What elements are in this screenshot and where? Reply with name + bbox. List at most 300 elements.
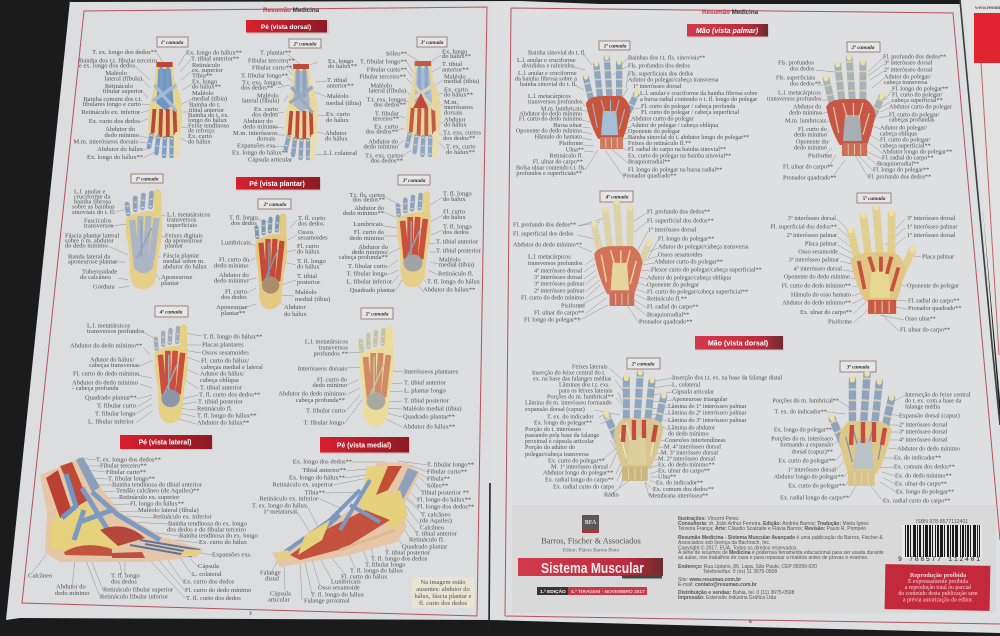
labels left: Tíbia** [305,490,325,496]
labels right: 1º interósseo dorsal [907,232,956,239]
labels right: da aponeurose [165,238,202,244]
panel: mão palmar 5ª camada [770,193,961,334]
labels left: dedo mínimo [105,132,139,139]
credits: as aulas, nos trabalhos de casa e para repassar a matéria antes de provas e exames. [678,555,868,561]
labels left: Ex. radial longo do carpo** [545,476,614,484]
labels right: Bainha do t. [189,102,221,108]
labels right: Fl. profundo dos dedos** [883,54,946,60]
layer label: 5ª camada [863,196,886,202]
labels right: T. tibial posterior [404,398,450,404]
labels left: 2º interósseo palmar [534,288,584,294]
labels right: Fl. radial do carpo na bainha sinovial** [628,146,726,153]
labels left: Bainha dos t.t. fibular terceiro [79,58,157,64]
labels right: Bainha do t. ex. [188,112,229,119]
labels left: L.l. metatársicos [305,338,348,346]
labels left: T. fibular longo [304,420,344,426]
labels right: Abdutor do hálux** [197,420,249,426]
labels bottom and right: Lumbricais [331,578,361,586]
labels: T. fl. longo [111,572,140,580]
layer label: 1ª camada [604,44,627,50]
heading: Pé (vista dorsal): Pé (vista dorsal) [261,24,311,31]
labels right [623,54,758,180]
labels left: divididos e rafeiridos [522,62,575,70]
labels right: Ossos [298,229,314,236]
labels left: M.m. interósseos dorsais [73,138,138,146]
labels right: Ulna** [658,474,676,480]
labels right: Fl. profundo dos dedos** [647,208,710,216]
labels left: Pronador quadrado** [783,174,836,182]
labels left: Retináculo ex. inferior [81,109,141,116]
labels left: cabeça profunda** [296,397,345,404]
labels left: Fl. superficial dos dedos** [770,224,837,230]
labels left: 3º interósseo palmar [534,280,584,288]
labels right: Oponente do polegar [628,128,680,135]
labels left: dorsais [257,136,276,142]
labels left: sobre o m. abdutor [65,238,115,244]
heading: Mão (vista dorsal) [695,336,784,351]
labels bottom and right: T. fl. longo dos dedos [371,556,428,562]
labels right [649,374,782,500]
leader lines [238,219,297,310]
labels: Fl. longo do hálux** [130,500,184,508]
labels left: transversos [84,222,114,230]
note box: hálux, fáscia plantar e [414,593,472,600]
labels left [770,215,852,326]
labels right: Fl. curto do polegar / cabeça profunda [641,103,736,110]
labels right [186,50,242,146]
panel: mão palmar 2ª camada [767,42,952,182]
labels left: Retináculo ex. inferior [259,496,319,502]
labels left: transversos profundos [767,96,822,102]
labels left: Pisiforme [808,152,832,160]
labels left: do dedo mínimo [65,242,108,250]
labels right: Fl. superficial dos dedos** [647,218,714,224]
labels bottom and right: T. fl. longo do hálux [350,568,404,574]
labels left: aponeurose plantar [68,258,118,266]
labels: Retináculo ex. superior [119,494,180,501]
labels bottom and right: Osso sesamoide [318,584,360,592]
labels left: 2º interósseo palmar [787,232,837,239]
labels right: Pronador quadrado** [623,172,676,180]
labels left: T. ex. longo dos dedos** [92,49,157,56]
labels right: Membrana interóssea** [649,492,708,500]
labels right: T. tibial anterior [436,238,479,246]
labels right: Maléolo [327,93,349,100]
labels left: Abdutor do [105,126,135,133]
labels right: M. 4º interósseo dorsal [664,444,721,450]
labels left: Bainha sinovial do t. fl. [528,50,587,56]
labels left: Lumbricais [353,221,383,228]
labels right: Lâmina do 2º interósseo palmar [668,410,747,416]
labels right: superficiais [167,222,197,229]
page: right [490,0,1000,633]
labels right: Bainhas dos t.t. fls. sinoviais** [628,54,705,62]
labels right: tibial anterior [189,107,225,114]
labels left: Ex. longo do hálux** [232,150,288,156]
labels: Retináculo ex. inferior [153,514,212,520]
labels bottom and right: Sóleo** [427,482,448,490]
labels left: Tuberosidade [82,268,117,276]
labels right: Fls. superficiais dos dedos [628,70,694,78]
labels: T. fibular longo** [108,476,155,482]
panel: pé dorsal 1ª camada [73,37,242,161]
labels left: dedo mínimo [794,144,827,152]
labels left: ex. na base das falanges médias [533,376,612,382]
labels left: dos dedos** [366,128,398,136]
note box: fl. curto dos dedos [419,600,467,607]
labels left: transversos profundos [528,98,583,106]
labels right: cabeça oblíqua [200,377,239,384]
leader lines [272,54,327,155]
credits: Impressão: Extensão Indústria Gráfica Ltda [678,595,776,601]
labels right: do hálux [188,138,211,146]
labels left: dedo mínimo [214,278,248,284]
labels right: Inserção dos t.t. ex. na base da falange distal [672,374,782,382]
labels left: M.m. interósseos [233,130,278,137]
labels right: Fl. curto do polegar/ [892,92,943,98]
labels bottom and right: T. calcâneo [421,512,450,518]
illustration: medial foot [272,462,420,567]
labels right: anterior** [442,66,469,74]
labels right: Fl. radial do carpo** [647,304,699,310]
labels left: Porção do t. interósseo [525,426,581,433]
labels right: T. fl. curto [298,215,325,222]
leader lines [134,332,202,424]
labels left: Fl. curto do dedo mínimo [73,370,139,378]
labels left: do calcâneo [80,274,111,281]
labels left [278,338,348,426]
labels left anchored: Retináculo fl. [549,152,583,160]
labels left: Fl. profundo dos dedos** [513,222,576,228]
labels right: T. tibial [442,61,462,68]
labels left: Abdutor do [219,272,249,279]
layer label [627,358,660,369]
labels right: Fl. longo do polegar** [873,166,929,174]
labels right [403,368,461,430]
labels: dos dedos [111,578,137,586]
labels right [161,212,211,287]
labels right: do hálux [443,196,466,203]
callout: reprodução proibida: Reprodução proibida [910,572,966,579]
leader lines [108,208,165,288]
labels bottom and right: Fibular curto** [427,468,467,476]
third sheet site text: www.resum [975,6,1000,11]
panel: pé plantar 5ª camada [278,308,461,430]
labels left: dedo mínimo/ [352,249,388,256]
leader lines [816,58,892,178]
labels right: Adutor do polegar/cabeça oblíqua [647,274,731,282]
labels right: do hálux [297,248,320,256]
labels left [73,49,157,161]
labels right: Aponeurose triangular [672,396,728,403]
illustration: hand [606,372,664,481]
labels right: Quadrado plantar** [403,414,455,420]
labels left: T. ex. longo do hálux [252,502,308,510]
labels: Expansões exs. [212,552,252,558]
panel: mão palmar 4ª camada [513,191,762,326]
credits: Ilustrações: Vincent Perez. [678,516,740,522]
layer label [398,175,430,185]
labels right: Abdutor [325,130,348,137]
labels left: Abdutor do [354,205,384,212]
labels right: Abdutor [444,116,466,124]
labels left: Ex. longo do polegar** [534,420,592,426]
labels left: dedo mínimo [364,144,398,150]
labels left: T. fibular longo [95,410,136,418]
edition bar [537,587,647,595]
labels right: Ex. comum dos dedos** [894,464,955,470]
labels right: do hálux** [444,92,473,98]
page number 6: 6 [749,619,752,625]
credits: Copyright © 2017, EUA. Todos os direitos reservados. [678,544,798,552]
labels right: Fáscia plantar [163,252,200,260]
labels left: cabeças transversas [89,362,140,369]
labels left: Ex. longo do hálux** [87,154,143,161]
labels right: Oponente do polegar [647,282,699,288]
labels right: Ex. ulnar do carpo** [658,468,710,474]
labels left: Fl. ulnar do carpo** [534,310,584,316]
labels: Bainha tendínosa do ex. longo [168,520,247,528]
labels: Bainha tendínosa do ex. longo [179,532,258,540]
labels left: Abdutor longo do polegar** [774,474,844,480]
labels left: dos dedos** [371,158,403,164]
labels left: Feixes laterais [572,364,608,370]
labels right: plantar [165,242,184,250]
credits: Site: www.resumao.com.br [678,577,741,583]
labels: Bainha tendínosa do tibial anterior [112,482,203,488]
labels left: Fáscia plantar lateral [65,232,119,240]
labels right: L.l. metatársicos [167,212,211,218]
labels left: Gordura [93,284,115,290]
labels right: Ex. longo [328,58,353,65]
illustration: foot plantar [256,217,287,309]
labels left: Fl. longo do polegar** [524,316,580,324]
labels right: dos dedos [298,220,324,228]
leader lines [344,352,403,427]
labels right: cabeça transversa [884,79,928,86]
labels left: Ex. radial longo do carpo** [780,494,849,502]
labels right: interósseos [444,104,473,111]
layer label: 4ª camada [159,310,183,316]
labels left: Interósseos dorsais [298,366,347,372]
labels left: Fl. curto do [354,229,384,236]
labels left: Retináculo [105,83,133,90]
labels right: Cápsula articular [672,388,714,396]
heading: Pé (vista dorsal) [246,20,329,34]
labels left: Tibial anterior** [302,467,346,474]
labels right: T. tibial posterior [436,248,482,254]
layer label [155,306,188,317]
labels right: Interósseos plantares [404,368,459,376]
labels left: Ex. curto [374,124,398,130]
labels right: Maléolo medial (tíbia) [403,406,461,412]
labels right: Fls. profundos dos dedos [628,62,690,70]
panel: mão dorsal 2ª camada [525,358,782,500]
labels right: cabeça superficial** [880,142,931,150]
labels right: 1º interósseo dorsal [648,226,697,234]
labels left: fibular superior [103,88,144,95]
labels bottom and right: Fl. longo dos dedos** [417,504,474,510]
labels bottom and right: T. fl. longo do hálux [311,592,365,598]
leader lines [827,395,905,501]
labels left: transversos profundos [528,260,583,267]
labels left: Ex. curto do polegar** [788,482,845,490]
labels right: Fl. curto do polegar / cabeça superficial [641,109,739,116]
labels left: passando pela base da falange [525,432,599,439]
labels right: Fl. ulnar do carpo** [900,326,950,334]
labels right: do dedo mínimo [668,430,709,438]
labels left: T. fibular curto [306,408,345,414]
labels left: fibulares longo e curto [82,101,141,108]
labels right: L.l. anular e cruciforme da bainha fibrosa sobre [640,90,758,97]
labels bottom and right: Retináculo fl. [409,536,445,544]
labels right: Adutor do polegar/cabeça transversa [658,244,749,250]
labels right: Adutor do polegar/ [880,124,927,132]
labels left [771,398,849,502]
panel: pé plantar 4ª camada [70,306,263,426]
title bar: Sistema Muscular: Sistema Muscular [541,560,644,577]
labels left: 4º interósseo dorsal [794,266,842,272]
labels right: Ex. curto [188,133,212,140]
labels right: T. fl. longo do hálux [427,278,481,286]
labels right: T. tibial posterior [198,398,244,406]
labels right: Adutor do polegar/ [884,74,931,80]
leader lines [574,54,641,176]
labels right: Lâmina do abdutor [668,424,715,432]
callout: reprodução proibida: do conteúdo desta publicação sem [898,591,978,597]
publisher: Barros, Fischer & Associados [541,536,641,546]
labels bottom and right [260,462,474,604]
labels left: Ex. radial curto do carpo [553,484,614,490]
labels right: Fl. curto [443,208,465,216]
labels left: Porções do m. interósseo [771,436,833,442]
labels right: Braquiorradial** [628,158,670,166]
labels left: Fascículos [84,218,112,224]
labels left: Abdutor do dedo mínimo** [70,342,142,350]
layer label: 1ª camada [161,40,184,46]
labels right: Abdutor longo do polegar** [882,148,952,156]
credits: Resumão Medicina - Sistema Muscular Avançado é uma publicação da Barros, Fischer & [678,535,883,541]
labels right: Pronador quadrado** [908,305,961,312]
labels left: L. fibular inferior [346,278,393,286]
labels left: Maléolo [370,82,392,90]
labels left: dedo mínimo** [343,210,384,217]
labels right: M. 3º interósseo dorsal [661,450,718,456]
labels left: Retináculo ex. superior [273,482,334,488]
heading: Mão (vista dorsal): Mão (vista dorsal) [708,340,769,348]
labels right: 4º interósseo dorsal [899,436,948,444]
labels right: Fl. curto do polegar/ [880,136,931,144]
title bar: Sistema Muscular [518,558,663,578]
labels left [232,50,295,164]
layer label [840,361,876,372]
labels right: Maléolo [295,289,317,296]
labels left: Porção do adutor do [525,444,575,451]
labels left: Quadrado plantar** [85,394,137,402]
labels left: Fibular terceiro** [248,58,295,64]
labels right: Retináculo fl. [197,406,233,412]
labels: Tendão calcâneo (de Aquiles)** [116,488,199,494]
layer label [857,193,891,203]
labels right: Ex. longo [192,78,217,86]
labels right: Expansão dorsal (capuz) [899,412,960,420]
layer label: 5ª camada [366,312,389,318]
labels left: Abdutor do [368,138,398,146]
credits: A série de resumos de Medicina é poderosa ferramenta educacional para ser usada durante [678,550,884,556]
ISBN and barcode: ISBN 978-8577112401 [916,519,968,525]
labels left: Abdutor do dedo mínimo** [513,242,582,248]
labels left: Ex. longo do hálux** [289,474,345,482]
labels left: Ex. curto do polegar** [778,458,835,464]
labels right: Feixes do retináculo fl.** [628,140,691,147]
labels left: lateral (fíbula) [242,98,279,104]
labels left [65,188,119,290]
labels left [214,214,258,317]
illustration: foot dorsal [148,62,182,156]
labels right: T. tibial anterior** [191,56,239,62]
labels left: Aponeurose [216,304,248,311]
labels right: do hálux [325,136,348,142]
labels left anchored: M.m. lumbricais [541,106,583,112]
labels left: T. ex. do indicador [547,414,593,420]
labels left: Lâminas dos t.t. exs. [559,382,610,388]
labels right: T. fl. longo [297,258,326,265]
labels right: do hálux [326,117,349,124]
labels left: polegar/cabeça transversa [525,451,589,458]
labels left: Rádio [604,492,619,498]
credits: Endereço: Rua Lipiano, 86, Lapa, São Paulo, CEP 05050-020 [678,564,817,570]
labels left: T. fl. longo [229,214,258,222]
labels left: M.m. lumbricais [785,118,827,124]
labels right: Oponente do polegar [907,282,959,290]
leader lines [32,458,212,599]
labels right: do hálux** [442,53,471,60]
illustration: hand [831,373,892,486]
labels left: T. fibular longo** [360,58,407,66]
labels: Ex. curto do hálux [199,539,248,546]
labels right: Maléolo [439,256,461,264]
labels left: Quadrado plantar [350,287,396,294]
illustration: foot dorsal [406,61,441,155]
labels left: Fls. superficiais [776,74,816,82]
labels bottom and right: distal [265,576,279,582]
labels right: Maléolo [444,74,466,80]
labels bottom and right: Tibial posterior ** [421,490,469,496]
labels left: formando a expansão [780,442,833,448]
layer label [600,191,633,202]
labels right: Retináculo [192,62,220,69]
leader lines [135,53,192,158]
credits: Consultoria: dr. João Arthur Ferreira. Edição: Andréa Barros; Tradução: Maria Ignez [678,521,869,527]
illustration: hand [594,202,650,306]
leader lines [398,54,446,156]
illustration: foot plantar [360,330,394,426]
layer label: 4ª camada [605,194,629,200]
labels left: T. fibular curto [348,263,387,270]
layer label: 2ª camada [631,362,655,368]
panel: mão dorsal 3ª camada [771,361,971,504]
layer label: 2ª camada [851,45,875,51]
labels left: Fl. ulnar do carpo** [783,164,833,170]
labels bottom and right: Quadrado plantar [402,544,448,550]
labels right: Braquiorradial** [877,160,919,168]
labels left: Fibular terceiro** [359,74,406,80]
labels left anchored: profundos e superficiais** [516,170,582,177]
labels [28,456,258,602]
labels right [284,215,330,318]
labels left: T.t. exs. longos, [242,80,283,86]
labels right: T. ex. curto [446,144,475,150]
